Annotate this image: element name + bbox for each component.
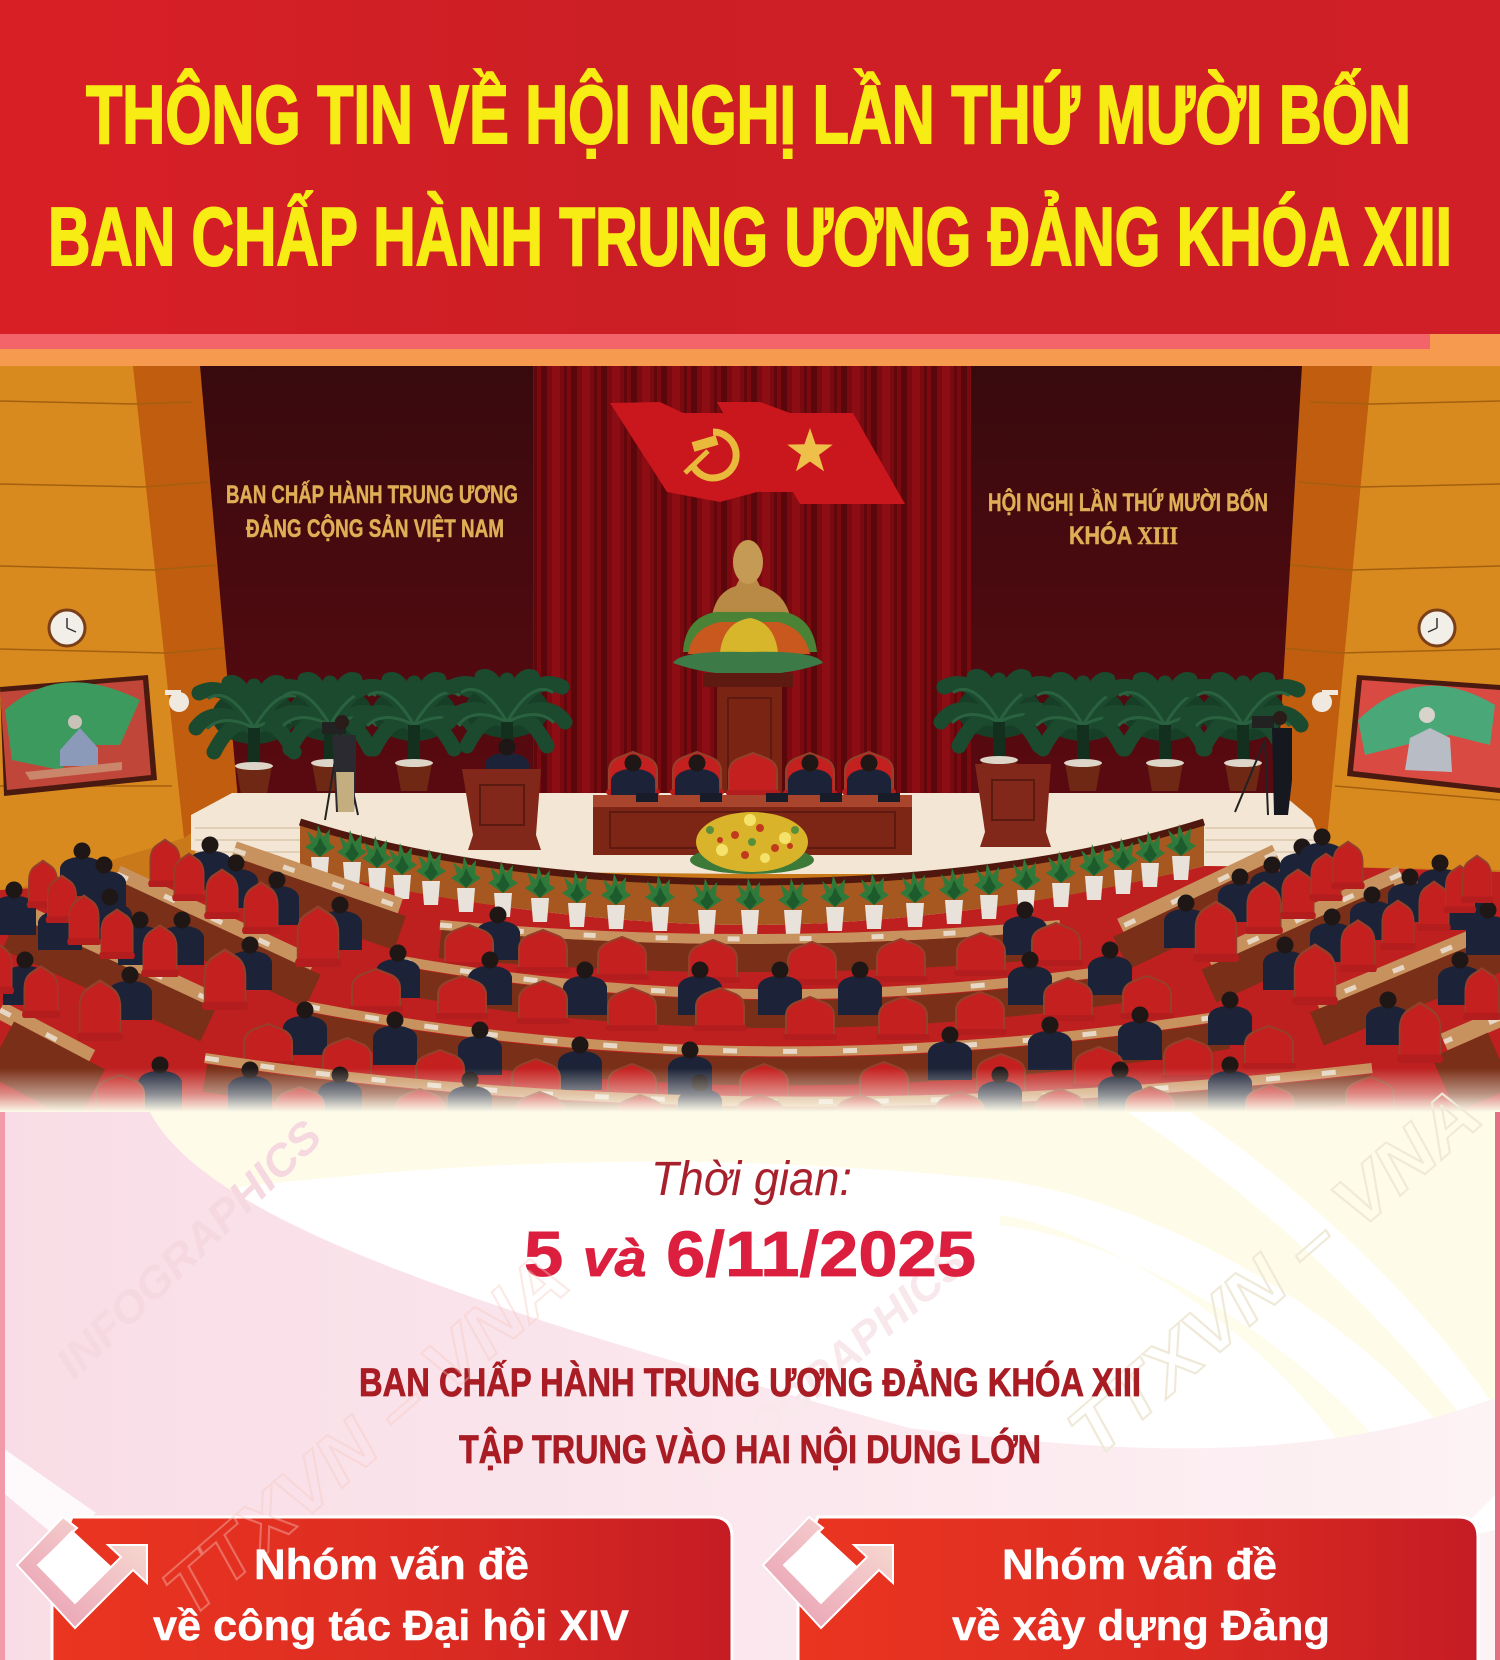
left delegate seating <box>0 836 400 1096</box>
stage floor and stairs <box>191 793 1329 874</box>
watermarks: TTXVN – VNA <box>1053 1073 1496 1473</box>
icon: hammer and sickle <box>685 432 736 478</box>
lecterns with speaker <box>462 738 1051 850</box>
panel: group on party building <box>763 1517 1478 1660</box>
panel heading: Nhóm vấn đề <box>1002 1541 1277 1589</box>
wall text right: HỘI NGHỊ LẦN THỨ MƯỜI BỐN <box>988 487 1268 517</box>
icon: diamond arrow <box>763 1517 893 1628</box>
row 4 desk and seats <box>95 1053 1395 1110</box>
wall text left: ĐẢNG CỘNG SẢN VIỆT NAM <box>246 513 504 543</box>
security cameras <box>165 690 1338 712</box>
wall text left <box>226 480 518 543</box>
watermarks: INFOGRAPHICS <box>683 1237 976 1501</box>
watermarks <box>47 1073 1496 1501</box>
left video screen <box>0 675 157 796</box>
centre delegate rows <box>95 902 1395 1110</box>
wall text right <box>989 488 1267 544</box>
photo: conference hall <box>0 366 1500 1138</box>
time label: Thời gian: <box>651 1153 852 1206</box>
background: lower page <box>0 1100 1500 1660</box>
header band <box>0 0 1500 366</box>
row of potted plants <box>305 824 1196 934</box>
panel heading: về công tác Đại hội XIV <box>153 1602 629 1650</box>
date: 5 và 6/11/2025 <box>524 1218 976 1290</box>
row 2 desk and seats <box>349 942 1174 1040</box>
red carpet <box>0 866 1500 1112</box>
red curtain <box>533 366 971 806</box>
maroon wall panels <box>200 366 1302 800</box>
watermark on panel: TTXVN – VNA <box>148 1238 584 1632</box>
panel: group on the XIV congress <box>17 1238 732 1660</box>
stage front rail and planter wall <box>300 822 1204 925</box>
watermarks: INFOGRAPHICS <box>47 1111 331 1388</box>
wall clocks <box>49 610 1455 646</box>
icon: diamond arrow <box>17 1517 147 1628</box>
potted palms <box>196 677 1301 794</box>
subheading: BAN CHẤP HÀNH TRUNG ƯƠNG ĐẢNG KHÓA XIII <box>359 1359 1141 1405</box>
presidium table with leaders <box>593 752 912 855</box>
wall text right: KHÓA XIII <box>1069 520 1178 550</box>
central bouquet <box>690 812 814 874</box>
subheading <box>359 1359 1141 1472</box>
panel heading <box>952 1541 1330 1650</box>
panel heading: Nhóm vấn đề <box>254 1541 529 1589</box>
panel heading <box>153 1541 629 1650</box>
bust on flower pedestal <box>673 540 823 795</box>
right delegate seating <box>1121 828 1500 1085</box>
party flag emblem <box>610 402 905 504</box>
hall side walls <box>0 366 1500 906</box>
row 3 desk and seats <box>241 992 1296 1107</box>
cameramen <box>322 711 1292 820</box>
panel heading: về xây dựng Đảng <box>952 1602 1330 1650</box>
row 1 desk and seats <box>440 902 1083 985</box>
wall text left: BAN CHẤP HÀNH TRUNG ƯƠNG <box>226 480 518 509</box>
subheading: TẬP TRUNG VÀO HAI NỘI DUNG LỚN <box>459 1426 1041 1472</box>
icon: gold star <box>787 428 833 471</box>
right video screen <box>1347 675 1500 793</box>
photo fade into page <box>0 1068 1500 1112</box>
title <box>48 68 1452 283</box>
